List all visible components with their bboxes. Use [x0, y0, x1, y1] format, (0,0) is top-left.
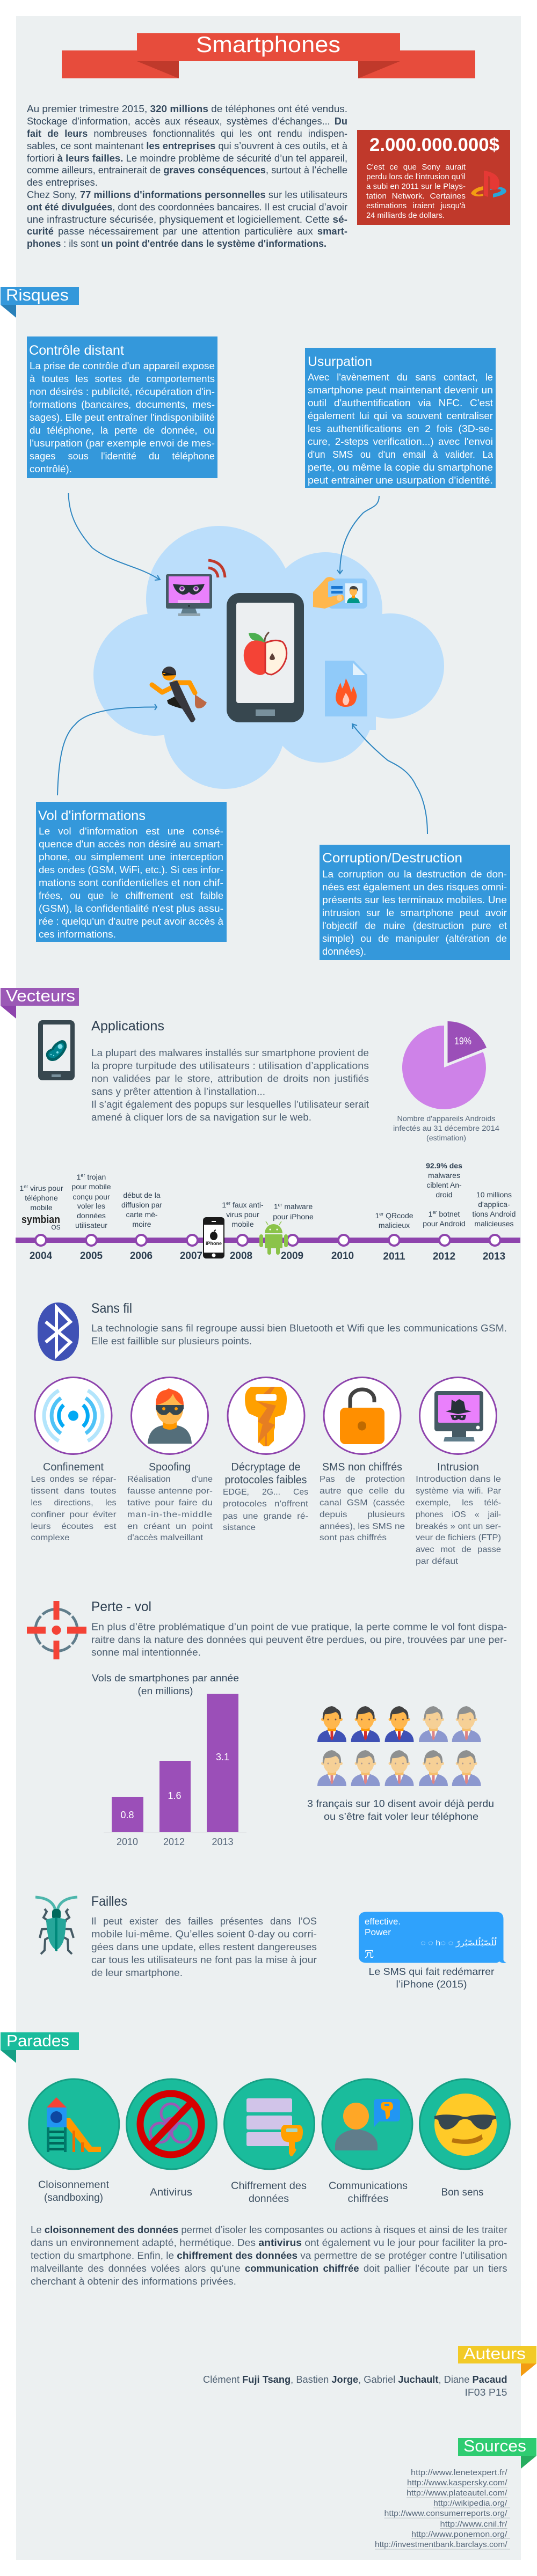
caption: 3 français sur 10: 3 français sur 10 disent avoir déjà perdu — [307, 1798, 494, 1809]
text: sources list: http://www.lenetexpert.fr/ — [411, 2469, 508, 2477]
item text: Spoofing: en créant un point — [127, 1522, 213, 1531]
text: failles: de leur smartphone. — [91, 1967, 183, 1978]
timeline label: 2004: OS — [51, 1224, 61, 1231]
callout: Sony 2 milliards: 24 milliards de dollars. — [366, 211, 445, 220]
timeline label: 2009: 1 — [274, 1202, 278, 1211]
item text: Décryptage: protocoles n'offrent — [223, 1499, 309, 1509]
parade labels: (sandboxing) — [44, 2192, 103, 2204]
panel: Contrôle distant: formations (bancaires, documents, mes- — [30, 399, 215, 410]
panel: Usurpation: Avec l'avènement du sans contact, le — [308, 372, 493, 383]
text: sources list: http://www.cnil.fr/ — [440, 2520, 508, 2529]
parade labels: Communications — [329, 2180, 408, 2192]
text: parades paragraph: tection du smartphone. Enfin, le chiffrement des données va permettre de se protéger contre l’utilisation — [31, 2250, 507, 2261]
text: applications: non validées par le store, attribution de droits non justifiés — [91, 1073, 369, 1084]
item text: Intrusion: Intrusion — [437, 1461, 479, 1473]
text: failles: gées dans une update, elles restent dangereuses — [91, 1942, 317, 1952]
timeline label: 2005: utilisateur — [75, 1221, 107, 1230]
bar chart: vols de smartphones: 1.6 — [168, 1790, 182, 1801]
timeline label: 2012: botnet — [437, 1210, 460, 1218]
timeline: 2006 — [130, 1250, 153, 1262]
panel: Contrôle distant: sages sous l'identité du téléphone — [30, 451, 215, 462]
item text: Intrusion — [416, 1461, 502, 1566]
icon: iPhone: iPhone — [206, 1241, 222, 1246]
heading: Perte - vol: Perte - vol — [91, 1599, 151, 1614]
panel: Contrôle distant: du téléphone, la perte de donnée, ou — [30, 425, 215, 436]
icon: playstation logo — [471, 171, 506, 197]
timeline label: 2012: er — [432, 1210, 437, 1215]
panel: Vol d'informations: Le vol d'information est une consé- — [39, 826, 223, 837]
timeline: 2009 — [281, 1250, 303, 1262]
pie chart: android infectés: infectés au 31 décembre 2014 — [393, 1124, 499, 1132]
panel: Usurpation: également lui qui va souvent centraliser — [308, 411, 493, 421]
section banner: Vecteurs: Vecteurs — [6, 986, 75, 1005]
callout: Sony 2 milliards: 2.000.000.000$ — [369, 135, 499, 155]
SMS bubble: 冗 — [365, 1949, 374, 1959]
item text: Spoofing: Spoofing — [149, 1461, 191, 1473]
item text: Spoofing: Réalisation d'une — [127, 1475, 213, 1484]
timeline label: 2008: 1 — [222, 1201, 226, 1209]
timeline label: 2004: symbian — [21, 1214, 60, 1226]
caption: Le SMS qui fait redémarrer: Le SMS qui fait redémarrer — [368, 1966, 494, 1977]
panel: Usurpation: d'un SMS ou d'un email à valider. La — [308, 449, 494, 460]
timeline label: 2004: mobile — [30, 1203, 53, 1212]
timeline label: 2008 — [222, 1201, 264, 1228]
item text: SMS non chiffrés: Pas de protection — [320, 1475, 405, 1484]
text: sources list — [375, 2469, 510, 2549]
title ribbon: Smartphones — [196, 32, 340, 57]
panel: Corruption/Destruction: nées est également un des risques omni- — [322, 882, 507, 892]
panel: Corruption/Destruction: présents sur les terminaux mobiles. Une — [322, 895, 507, 905]
caption: 3 français sur 10: ou s’être fait voler leur téléphone — [324, 1811, 478, 1822]
parade labels: Bon sens — [441, 2187, 483, 2198]
bar chart: vols de smartphones: Vols de smartphones par année — [92, 1673, 239, 1684]
parade labels: chiffrées — [348, 2193, 389, 2205]
callout: Sony 2 milliards: estimations iraient jusqu'à — [366, 202, 466, 210]
timeline label: 2009: pour iPhone — [273, 1212, 314, 1221]
circle: Confinement — [35, 1377, 112, 1454]
panel: Usurpation: perte, ou même la copie du smartphone — [308, 462, 493, 473]
timeline label: 2012: 92.9% des — [426, 1161, 462, 1170]
intro text: fait de leurs nombreuses fonctionnalités qui les ont rendu indispen- — [27, 128, 347, 139]
timeline label: 2013: malicieuses — [474, 1219, 514, 1228]
bar chart: vols de smartphones: 2012 — [163, 1836, 185, 1847]
intro text: des entreprises. — [27, 177, 98, 188]
panel: Corruption/Destruction — [320, 845, 510, 960]
timeline label: 2012 — [423, 1161, 466, 1228]
icon: hacked monitor — [166, 560, 225, 616]
timeline label: 2006: moire — [132, 1220, 151, 1228]
parade labels: Chiffrement des — [231, 2180, 307, 2192]
SMS bubble: Power — [365, 1927, 391, 1937]
text: applications — [91, 1048, 369, 1123]
panel: Corruption/Destruction: l'objectif de nuire (destruction pure et — [322, 920, 507, 931]
panel: Vol d'informations: frées, ou que le chiffrement est faible — [39, 890, 223, 901]
icon: bug — [35, 1897, 77, 1954]
panel: Usurpation: cure, 2-steps verification...) avec l'envoi — [308, 436, 493, 447]
timeline label: 2005: données — [77, 1211, 106, 1220]
timeline label: 2013: 10 millions — [476, 1190, 512, 1199]
heading: Applications: Applications — [91, 1019, 164, 1034]
section banner: Auteurs: Auteurs — [463, 2344, 526, 2363]
cloud — [93, 526, 444, 789]
text: sans fil: La technologie sans fil regroupe aussi bien Bluetooth et Wifi que les communications GSM. — [91, 1323, 507, 1334]
intro text: sables, ce sont maintenant les entreprises qui s’ouvrent à ces outils, et à — [27, 141, 348, 151]
callout: Sony 2 milliards: C'est ce que Sony aurait — [366, 163, 466, 172]
heading: Sans fil: Sans fil — [91, 1301, 132, 1316]
text: failles: mobile lui-même. Qu’elles soient 0-day ou corri- — [91, 1929, 317, 1940]
timeline: 2007 — [180, 1250, 202, 1262]
panel: Contrôle distant: non désirés : publicité, récupération d'in- — [30, 386, 215, 397]
item text: Décryptage: sistance — [223, 1523, 256, 1532]
intro text: Stockage d’information, accès aux réseaux, systèmes d’échanges... Du — [27, 116, 347, 127]
heading: Failles: Failles — [91, 1894, 127, 1909]
timeline label: 2011: malicieux — [379, 1221, 410, 1230]
parade labels: Antivirus — [150, 2187, 192, 2198]
intro text: phones : ils sont un point d'entrée dans le système d'informations. — [27, 238, 326, 249]
text: perte vol: sonne mal intentionnée. — [91, 1647, 201, 1658]
timeline label: 2004: er — [24, 1184, 28, 1189]
item text: Décryptage: pas une grande ré- — [223, 1512, 308, 1521]
panel: Contrôle distant: contrôlé). — [30, 464, 72, 474]
intro text: ont été divulguées, dont des coordonnées bancaires. Il est crucial d’avoir — [27, 202, 347, 213]
timeline — [16, 1161, 520, 1262]
item text: Confinement — [31, 1461, 117, 1542]
timeline label: 2009: er — [278, 1202, 282, 1208]
item text: Décryptage: Décryptage de — [231, 1461, 301, 1473]
intro text: une infrastructure sécurisée, physiquement et logiciellement. Cette sé- — [27, 214, 347, 225]
text: parades paragraph — [31, 2224, 507, 2287]
section banner: Parades — [1, 2031, 79, 2063]
timeline: 2012 — [433, 1251, 455, 1262]
panel: Vol d'informations: des ondes (GSM, WiFi, etc.). Si ces infor- — [39, 865, 223, 875]
panel: Contrôle distant — [27, 336, 217, 478]
section banner: Vecteurs — [1, 986, 79, 1019]
SMS bubble — [359, 1912, 506, 1963]
panel: Vol d'informations: rée : quelqu'un d'autre peut avoir accès à — [39, 916, 224, 927]
panel: Vol d'informations: Vol d'informations — [38, 808, 146, 823]
text: applications: amené à cliquer lors de sa navigation sur le web. — [91, 1112, 311, 1123]
pie chart: android infectés: Nombre d'appareils Androids — [397, 1114, 495, 1123]
parade labels — [38, 2179, 483, 2205]
timeline label: 2005: conçu pour — [72, 1192, 110, 1201]
timeline label: 2012: ciblent An- — [426, 1181, 462, 1189]
title ribbon — [62, 32, 475, 78]
timeline label: 2012: 1 — [429, 1210, 432, 1218]
section banner: Auteurs — [458, 2344, 536, 2376]
intro text: Chez Sony, 77 millions d'informations personnelles sur les utilisateurs — [27, 189, 347, 200]
item text: Confinement: confiner pour éviter — [31, 1510, 117, 1519]
timeline label: 2005: trojan — [85, 1173, 106, 1181]
pie chart: android infectés — [393, 1021, 499, 1142]
timeline label: 2006: début de la — [123, 1191, 161, 1199]
panel: Vol d'informations: (GSM), la confidentialité n'est plus assu- — [39, 903, 223, 914]
timeline label: 2011: er — [379, 1211, 383, 1217]
item text: Confinement: Les ondes se répar- — [31, 1475, 116, 1484]
section banner: Parades: Parades — [6, 2031, 69, 2050]
timeline label: 2004: 1 — [19, 1184, 24, 1192]
text: sources list: http://www.plateautel.com/ — [407, 2489, 508, 2498]
panel: Usurpation — [305, 348, 496, 488]
bar chart: vols de smartphones: (en millions) — [137, 1686, 193, 1696]
text: sources list: http://wikipedia.org/ — [433, 2499, 508, 2508]
bar chart: vols de smartphones — [92, 1673, 246, 1847]
section banner: Sources: Sources — [463, 2436, 526, 2455]
timeline label: 2009 — [273, 1202, 314, 1221]
panel: Vol d'informations — [36, 802, 227, 942]
item text: SMS non chiffrés: années), les SMS ne — [320, 1522, 405, 1531]
panel: Contrôle distant: La prise de contrôle d'un appareil expose — [30, 361, 215, 371]
icon: smartphone with apple — [227, 593, 304, 722]
item text: Confinement: leurs écoutes est — [31, 1522, 117, 1531]
caption: Le SMS qui fait redémarrer — [368, 1966, 494, 1990]
text: sources list: http://www.kaspersky.com/ — [407, 2479, 508, 2487]
panel: Corruption/Destruction: Corruption/Destruction — [322, 851, 462, 866]
intro text — [27, 104, 348, 249]
panel: Contrôle distant: à toutes les sortes de comportements — [30, 374, 215, 384]
panel: Contrôle distant: l'usurpation (par exemple envoi de mes- — [30, 438, 215, 449]
timeline label: 2004: téléphone — [25, 1194, 58, 1202]
text: sources list: http://www.ponemon.org/ — [411, 2530, 508, 2539]
item text: Intrusion: Introduction dans le — [416, 1475, 501, 1484]
arrow: vol d'informations — [57, 704, 157, 795]
icon: burning file — [325, 661, 367, 716]
bar chart: vols de smartphones: 2010 — [117, 1836, 138, 1847]
timeline label: 2013: tions Android — [473, 1210, 516, 1218]
circle: Spoofing — [131, 1377, 208, 1454]
parade circle: antivirus — [127, 2079, 217, 2169]
timeline label: 2006 — [121, 1191, 162, 1228]
callout: Sony 2 milliards: tation Network. Certaines — [366, 192, 466, 201]
timeline label: 2012: droid — [436, 1190, 453, 1199]
icon: id card and hand — [313, 577, 367, 609]
timeline label: 2012: pour Android — [423, 1219, 466, 1228]
timeline: 2005 — [80, 1250, 103, 1262]
timeline label: 2009: malware — [282, 1202, 313, 1211]
item text: SMS non chiffrés: canal GSM (cassée — [320, 1498, 405, 1507]
timeline label: 2004 — [19, 1184, 63, 1231]
text: applications: la propre turpitude des utilisateurs : utilisation d’applications — [91, 1060, 369, 1071]
item text: Confinement: Confinement — [43, 1461, 104, 1473]
timeline label: 2008: faux anti- — [230, 1201, 264, 1209]
item text: Intrusion: phones iOS « jail- — [416, 1510, 501, 1519]
timeline label: 2005: pour mobile — [71, 1182, 111, 1191]
text: parades paragraph: malveillante des données volées alors qu’une communication chiffrée doit pallier l’écoute par un tiers — [31, 2263, 507, 2274]
timeline label: 2013: d'applica- — [478, 1200, 510, 1209]
timeline label: 2008: er — [226, 1201, 230, 1206]
pie chart: android infectés: 19% — [454, 1036, 471, 1046]
caption: Le SMS qui fait redémarrer: l’iPhone (2015) — [396, 1979, 467, 1990]
circle: Décryptage de protocoles faibles — [228, 1377, 304, 1454]
item text: SMS non chiffrés: depuis plusieurs — [320, 1510, 405, 1519]
timeline: 2008 — [230, 1250, 252, 1262]
callout: Sony 2 milliards: a subi en 2011 sur le Plays- — [366, 182, 466, 191]
timeline: 2010 — [331, 1250, 354, 1262]
timeline label: 2011 — [375, 1211, 413, 1230]
callout: Sony 2 milliards — [357, 130, 510, 225]
SMS bubble: ◌ ◌ h◌ ◌ لُلُصّبُلُلصّبُررً — [420, 1937, 497, 1948]
timeline label: 2004: virus pour — [28, 1184, 63, 1192]
icon: bluetooth — [38, 1302, 79, 1361]
circle: SMS non chiffrés — [324, 1377, 401, 1454]
timeline label: 2013 — [473, 1190, 516, 1228]
text: perte vol: En plus d’être problématique d’un point de vue pratique, la perte comme le vol font dispa- — [91, 1622, 507, 1633]
panel: Corruption/Destruction: simple) ou de manipuler (altération de — [322, 933, 507, 944]
parade circle: communications chiffrées — [322, 2079, 412, 2169]
panel: Corruption/Destruction: données). — [322, 946, 366, 957]
text: sources list: http://www.consumerreports.org/ — [384, 2509, 508, 2518]
item text: Spoofing: man-in-the-middle — [127, 1510, 213, 1519]
section banner: Sources — [458, 2436, 536, 2469]
timeline label: 2006: carte mé- — [126, 1210, 158, 1219]
section banner: Risques — [1, 286, 79, 318]
arrow: contrôle distant — [69, 493, 160, 580]
panel: Vol d'informations: phone, ou simplement une interception — [39, 852, 223, 862]
arrow: corruption — [352, 724, 427, 834]
timeline label: 2012: malwares — [428, 1171, 460, 1180]
SMS bubble: effective. — [365, 1916, 401, 1927]
timeline label: 2008: virus pour — [226, 1210, 259, 1219]
item text: SMS non chiffrés: sont pas chiffrés — [320, 1533, 387, 1542]
text: parades paragraph: cherchant à obtenir des informations privées. — [31, 2276, 236, 2287]
bar chart: vols de smartphones: 3.1 — [216, 1752, 229, 1762]
circle: Intrusion — [420, 1377, 496, 1454]
item text: SMS non chiffrés — [320, 1461, 405, 1542]
timeline label: 2005: voler les — [77, 1202, 105, 1210]
parade labels: données — [249, 2193, 289, 2205]
text: applications: La plupart des malwares installés sur smartphone provient de — [91, 1048, 369, 1058]
panel: Usurpation: outil d'authentification via NFC. C'est — [308, 398, 493, 408]
icon: people grid, 3 of 10 — [317, 1706, 481, 1786]
item text: Intrusion: système via wifi. Par — [416, 1487, 502, 1496]
item text: SMS non chiffrés: SMS non chiffrés — [322, 1461, 402, 1473]
parade circle: chiffrement — [224, 2079, 315, 2169]
item text: Intrusion: breakés » ont un ser- — [416, 1522, 501, 1531]
timeline label: 2008: mobile — [231, 1220, 254, 1228]
item text: Spoofing: fausse antenne por- — [127, 1487, 213, 1496]
timeline label: 2005 — [71, 1173, 111, 1230]
item text: Spoofing: d'accès malveillant — [127, 1533, 204, 1542]
parade labels: Cloisonnement — [38, 2179, 110, 2191]
parade circle: sandboxing — [29, 2079, 119, 2169]
panel: Vol d'informations: quence d'un accès non désiré au smart- — [39, 839, 223, 850]
text: authors: Clément Fuji Tsang, Bastien Jorge, Gabriel Juchault, Diane Pacaud — [203, 2374, 507, 2385]
item text: Confinement: les directions, les — [31, 1498, 116, 1507]
item text: Intrusion: veur de fichiers (FTP) — [416, 1533, 501, 1542]
timeline label: 2011: 1 — [375, 1211, 379, 1220]
item text: Confinement: tissent dans toutes — [31, 1487, 116, 1496]
item text: Intrusion: avec mot de passe — [416, 1545, 501, 1554]
item text: Confinement: complexe — [31, 1533, 70, 1542]
intro text: curité passe nécessairement par une attention particulière aux smart- — [27, 226, 347, 237]
timeline label: 2005: er — [81, 1173, 85, 1178]
icon: Android — [259, 1221, 288, 1255]
item text: Spoofing: tative pour faire du — [127, 1498, 213, 1507]
timeline label: 2006: diffusion par — [121, 1201, 162, 1209]
text: sans fil — [91, 1323, 507, 1346]
bar chart: vols de smartphones: 2013 — [212, 1836, 234, 1847]
panel: Corruption/Destruction: intrusion sur le smartphone peut avoir — [322, 908, 507, 918]
intro text: fortiori à leurs failles. Le moindre problème de sécurité d’un tel appareil, — [27, 153, 347, 164]
pie chart: android infectés: (estimation) — [426, 1133, 466, 1142]
icon: target — [27, 1601, 86, 1659]
text: applications: Il s’agit également des popups sur lesquelles l’utilisateur serait — [91, 1099, 369, 1110]
callout: Sony 2 milliards: perdu lors de l'intrusion qu'il — [366, 173, 466, 181]
item text: Intrusion: exemple, les télé- — [416, 1498, 501, 1507]
intro text: Au premier trimestre 2015, 320 millions de téléphones ont été vendus. — [27, 104, 347, 114]
item text: Décryptage — [223, 1461, 309, 1532]
panel: Usurpation: les authentifications en 2 fois (3D-se- — [308, 423, 493, 434]
timeline: 2004 — [30, 1250, 53, 1262]
text: authors — [203, 2374, 507, 2398]
icon: thief running — [152, 667, 207, 722]
item text: Décryptage: EDGE, 2G... Ces — [223, 1488, 308, 1497]
text: failles — [91, 1916, 317, 1978]
bar chart: vols de smartphones: 0.8 — [120, 1810, 134, 1820]
icon: iPhone — [203, 1217, 224, 1258]
text: parades paragraph: Le cloisonnement des données permet d’isoler les composantes ou actions à risques et ainsi de les traiter — [31, 2224, 507, 2235]
caption: 3 français sur 10 — [307, 1798, 494, 1822]
parade circle: bon sens — [420, 2079, 510, 2169]
item text: Intrusion: par défaut — [416, 1557, 459, 1566]
text: sans fil: Elle est faillible sur plusieurs points. — [91, 1336, 252, 1346]
panel: Vol d'informations: ces informations. — [39, 929, 116, 940]
text: parades paragraph: dans un environnement adapté, hermétique. Des antivirus ont également vu le jour pour faciliter la pro- — [31, 2237, 507, 2248]
text: sources list: http://investmentbank.barclays.com/ — [375, 2541, 508, 2549]
text: applications: sans y prêter attention à l’installation... — [91, 1086, 265, 1097]
panel: Usurpation: peut entrainer une usurpation d'identité. — [308, 475, 493, 486]
intro text: comme ailleurs, entrainerait de graves conséquences, surtout à l’échelle — [27, 165, 347, 175]
panel: Contrôle distant: sages). Elle peut entraîner l'indisponibilité — [30, 412, 215, 423]
text: failles: Il peut exister des failles présentes dans l’OS — [91, 1916, 317, 1927]
panel: Contrôle distant: Contrôle distant — [29, 343, 124, 358]
item text: Décryptage: protocoles faibles — [224, 1474, 307, 1486]
item text: SMS non chiffrés: autre que celle du — [320, 1487, 405, 1496]
timeline label: 2005: 1 — [77, 1173, 81, 1181]
panel: Vol d'informations: mations sont confidentielles et non chif- — [39, 877, 223, 888]
panel: Usurpation: smartphone peut maintenant devenir un — [308, 385, 493, 396]
item text: Spoofing — [127, 1461, 213, 1542]
section banner: Risques: Risques — [6, 286, 69, 304]
text: authors: IF03 P15 — [465, 2387, 507, 2398]
panel: Corruption/Destruction: La corruption ou la destruction de don- — [322, 869, 507, 880]
text: perte vol: raitre dans la nature des données qui peuvent être perdues, ou pire, trouvées par une per- — [91, 1635, 507, 1645]
icon: phone with bacterium — [38, 1020, 75, 1080]
text: failles: car tous les utilisateurs ne font pas la mise à jour — [91, 1955, 317, 1965]
timeline: 2011 — [383, 1251, 405, 1262]
timeline label: 2011: QRcode — [383, 1211, 413, 1220]
text: perte vol — [91, 1622, 507, 1658]
timeline: 2013 — [483, 1251, 505, 1262]
arrow: usurpation — [337, 496, 379, 574]
panel: Usurpation: Usurpation — [308, 354, 372, 369]
